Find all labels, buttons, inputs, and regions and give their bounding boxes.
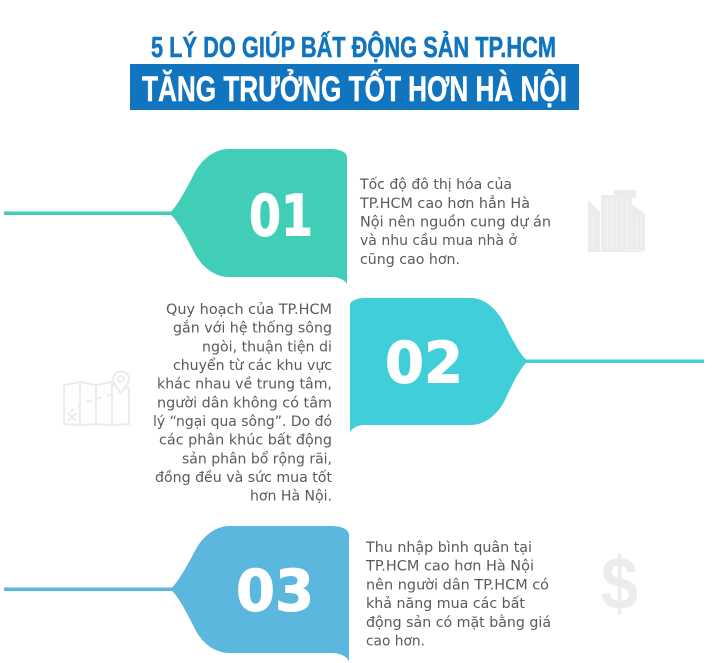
text block 02: Quy hoạch của TP.HCM bbox=[166, 302, 332, 318]
panel: reason 01 bbox=[4, 149, 645, 284]
heading line 1: 5 LÝ DO GIÚP BẤT ĐỘNG SẢN TP.HCM bbox=[151, 30, 556, 64]
badge 01 bbox=[4, 149, 347, 284]
text block 03: cao hơn. bbox=[366, 634, 425, 650]
heading banner bbox=[130, 64, 579, 110]
text block 02: lý “ngại qua sông”. Do đó bbox=[153, 414, 332, 430]
icon: dollar sign: $ bbox=[601, 542, 638, 625]
icon: map with pin bbox=[64, 372, 129, 425]
panel: reason 02 bbox=[64, 298, 704, 505]
text block 01: TP.HCM cao hơn hẳn Hà bbox=[359, 195, 530, 212]
text block 02: các phân khúc bất động bbox=[159, 433, 332, 449]
text block 02: khác nhau về trung tâm, bbox=[157, 376, 332, 393]
text block 02: hơn Hà Nội. bbox=[250, 489, 332, 505]
badge 02: 02 bbox=[385, 330, 463, 396]
text block 03: khả năng mua các bất bbox=[366, 596, 526, 612]
badge 03 bbox=[4, 526, 349, 661]
text block 03: TP.HCM cao hơn Hà Nội bbox=[365, 559, 534, 575]
text block 02: ngòi, thuận tiện di bbox=[202, 339, 332, 355]
icon: buildings bbox=[587, 190, 645, 252]
badge 02 bbox=[350, 298, 704, 432]
text block 03 bbox=[365, 540, 551, 650]
badge 03: 03 bbox=[236, 558, 314, 624]
text block 01: Tốc độ đô thị hóa của bbox=[359, 176, 512, 193]
text block 02: người dân không có tâm bbox=[157, 395, 332, 411]
text block 01 bbox=[359, 176, 551, 268]
panel: reason 03 bbox=[4, 526, 638, 661]
text block 02: gắn với hệ thống sông bbox=[173, 320, 332, 337]
text block 01: và nhu cầu mua nhà ở bbox=[360, 233, 518, 249]
text block 01: cũng cao hơn. bbox=[360, 252, 460, 268]
badge 01: 01 bbox=[249, 184, 313, 250]
text block 03: nên người dân TP.HCM có bbox=[366, 577, 549, 593]
text block 02 bbox=[153, 302, 333, 505]
heading banner: TĂNG TRƯỞNG TỐT HƠN HÀ NỘI bbox=[142, 69, 567, 109]
text block 02: chuyển từ các khu vực bbox=[173, 357, 332, 374]
text block 02: sản phân bổ rộng rãi, bbox=[182, 450, 332, 467]
title bbox=[130, 30, 579, 110]
text block 03: Thu nhập bình quân tại bbox=[365, 540, 532, 556]
text block 02: đồng đều và sức mua tốt bbox=[155, 469, 333, 486]
text block 03: động sản có mặt bằng giá bbox=[366, 614, 551, 631]
text block 01: Nội nên nguồn cung dự án bbox=[360, 214, 551, 230]
